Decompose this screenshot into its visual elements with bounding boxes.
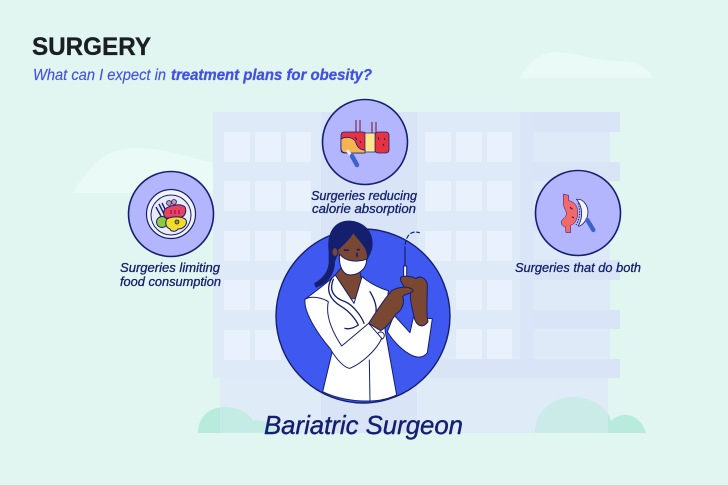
label: Surgeries limiting — [120, 260, 221, 275]
lab coat body — [305, 275, 397, 402]
subtitle: treatment plans for obesity? — [171, 67, 372, 84]
caption: bariatric surgeon: Bariatric Surgeon — [264, 410, 463, 440]
eyes — [344, 250, 359, 256]
raised sleeve — [387, 315, 432, 357]
label: Surgeries that do both — [515, 260, 641, 275]
icon: liver with scalpel — [322, 100, 408, 184]
head — [338, 233, 367, 270]
label: food consumption — [120, 274, 221, 289]
surgeon illustration — [305, 221, 432, 402]
green hills — [198, 395, 646, 433]
subtitle — [33, 67, 372, 84]
syringe — [404, 232, 419, 287]
subtitle: What can I expect in — [33, 67, 166, 84]
option: surgeries that do both — [515, 170, 641, 275]
cloud: left — [73, 148, 225, 193]
raised forearm and hand — [400, 276, 428, 326]
option: surgeries reducing calorie absorption — [311, 100, 418, 216]
label: Surgeries reducing — [311, 188, 418, 203]
cloud: top right — [520, 52, 653, 78]
icon: stomach with scalpel — [536, 170, 620, 256]
title: SURGERY — [32, 33, 151, 61]
neck — [335, 268, 365, 303]
lower forearm and hand — [369, 287, 413, 331]
hair — [314, 221, 373, 288]
label — [311, 188, 418, 216]
hospital building — [213, 112, 620, 433]
option: surgeries limiting food consumption — [120, 172, 221, 289]
lower sleeve — [305, 297, 382, 368]
stethoscope — [329, 278, 376, 329]
mask — [339, 254, 367, 275]
icon: plate of food — [128, 172, 214, 256]
ear — [332, 248, 338, 256]
undershirt — [350, 297, 365, 320]
bariatric surgeon portrait — [276, 221, 450, 403]
portrait circle — [276, 229, 450, 403]
coat button — [377, 332, 384, 339]
label — [120, 260, 221, 289]
label: calorie absorption — [312, 201, 416, 216]
